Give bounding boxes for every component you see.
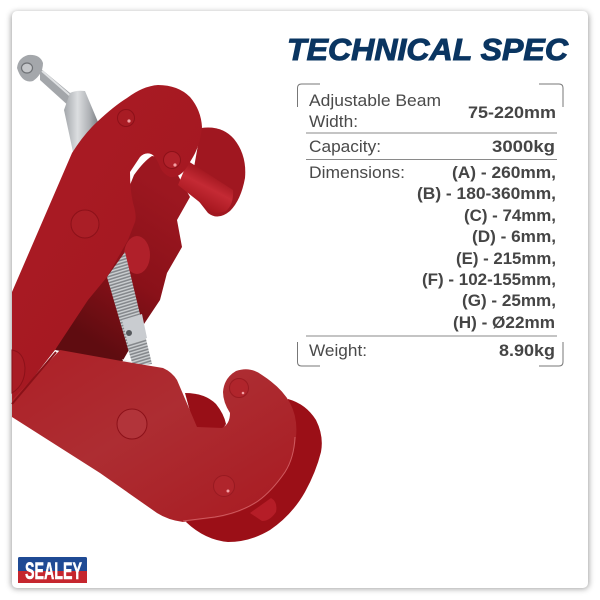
lower pin [250, 498, 276, 521]
threaded rod [107, 252, 152, 366]
spec table [298, 84, 563, 366]
row dividers [306, 133, 557, 336]
row: adjustable beam width: Width: [309, 113, 358, 131]
row: dimensions: (B) - 180-360mm, [417, 185, 556, 203]
row: adjustable beam width [309, 92, 556, 131]
row: dimensions: (C) - 74mm, [464, 207, 556, 225]
row: weight [309, 342, 555, 360]
row: dimensions: (E) - 215mm, [456, 250, 556, 268]
row: adjustable beam width: 75-220mm [468, 104, 556, 122]
row: dimensions: Dimensions: [309, 164, 405, 182]
title: TECHNICAL SPEC [287, 32, 569, 67]
logo: Sealey [18, 557, 87, 585]
rear cross boss [124, 236, 150, 274]
row: dimensions: (F) - 102-155mm, [422, 271, 556, 289]
row: dimensions: (A) - 260mm, [452, 164, 556, 182]
upper front plate [12, 85, 202, 405]
row: dimensions: (D) - 6mm, [472, 228, 556, 246]
row: weight: Weight: [309, 342, 367, 360]
upper pin [178, 161, 233, 213]
frame corners [298, 84, 563, 366]
row: dimensions: (G) - 25mm, [462, 292, 556, 310]
row: adjustable beam width: Adjustable Beam [309, 92, 441, 110]
row: capacity: Capacity: [309, 138, 381, 156]
upper plate end disc [12, 350, 25, 393]
row: capacity: 3000kg [492, 138, 555, 156]
lower rear hook [185, 393, 226, 430]
lower rear disc [186, 399, 322, 542]
lower plate joint edge [12, 352, 56, 404]
lower front plate edge [183, 437, 295, 521]
row: dimensions: (H) - Ø22mm [453, 314, 555, 332]
lower rivets [117, 378, 248, 496]
upper rear plate [55, 156, 190, 362]
row: capacity [309, 138, 555, 156]
upper rivets [71, 110, 180, 238]
upper rear disc [190, 127, 245, 217]
bolt and steel sleeve [17, 55, 98, 152]
product photo: beam clamp [12, 55, 322, 542]
logo: Sealey: SEALEY [25, 558, 82, 585]
row: dimensions [309, 164, 556, 332]
row: weight: 8.90kg [499, 342, 555, 360]
lower front plate [12, 350, 296, 522]
